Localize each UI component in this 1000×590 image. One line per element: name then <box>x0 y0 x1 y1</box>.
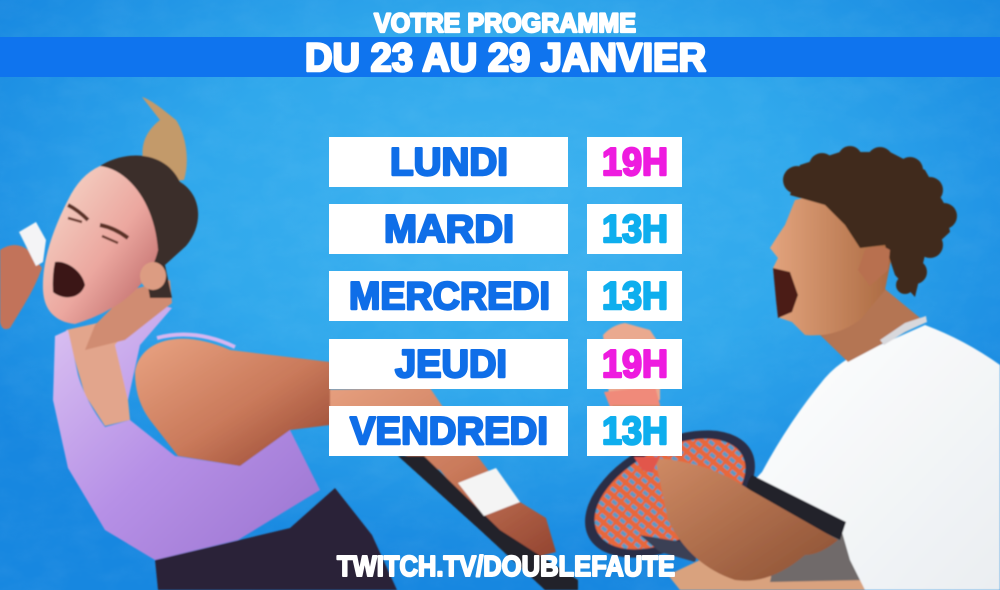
row: vendredi: VENDREDI <box>350 410 548 453</box>
left raised arm <box>0 245 42 329</box>
right wrist pink band <box>604 386 660 407</box>
row: jeudi: JEUDI <box>395 343 507 386</box>
left wrist band <box>19 222 46 266</box>
right hair <box>783 146 957 297</box>
right shirt <box>745 325 1000 590</box>
right necklace <box>880 316 927 345</box>
left eyes <box>68 205 128 243</box>
left ear <box>140 262 166 290</box>
schedule table <box>329 137 682 456</box>
left tank top <box>53 302 320 560</box>
right open mouth <box>773 268 798 318</box>
right face <box>770 185 895 335</box>
heading: dates: DU 23 AU 29 JANVIER <box>305 36 706 80</box>
left face <box>43 166 158 324</box>
row: jeudi: 19H <box>602 343 668 386</box>
left open mouth <box>53 262 85 297</box>
footer link: TWITCH.TV/DOUBLEFAUTE <box>337 551 675 583</box>
row: lundi: LUNDI <box>390 141 508 184</box>
row: mercredi <box>329 271 682 321</box>
row: vendredi: 13H <box>602 410 668 453</box>
left racket <box>398 456 578 590</box>
banner bar <box>0 37 1000 77</box>
row: mercredi: MERCREDI <box>349 275 550 318</box>
left skirt <box>155 488 397 590</box>
row: vendredi <box>329 406 682 456</box>
row: mardi: MARDI <box>384 208 514 251</box>
row: jeudi <box>329 339 682 389</box>
left armhole strap <box>157 335 235 347</box>
left hair <box>100 155 198 298</box>
row: mardi: 13H <box>602 208 668 251</box>
row: lundi: 19H <box>602 141 668 184</box>
left shoulder and upper arm <box>135 339 330 466</box>
right wrist band <box>634 457 660 473</box>
row: mercredi: 13H <box>602 275 668 318</box>
left arm lower <box>300 388 556 560</box>
row: mardi <box>329 204 682 254</box>
left hair bun <box>142 97 187 182</box>
right forearm behind boxes <box>612 405 660 465</box>
right arm <box>655 458 838 581</box>
right sleeve trim <box>746 475 846 540</box>
heading: votre programme: VOTRE PROGRAMME <box>374 8 636 38</box>
row: lundi <box>329 137 682 187</box>
right lower hand <box>668 560 865 590</box>
right grey lining <box>770 530 865 582</box>
right raised fist <box>603 323 660 405</box>
player: left woman <box>0 97 578 590</box>
right ear <box>858 246 890 286</box>
player: right man <box>564 146 1000 590</box>
racket <box>564 404 776 584</box>
right neck <box>815 285 925 362</box>
left neck <box>85 280 172 350</box>
left wristband nike <box>458 468 520 516</box>
left chest <box>66 318 130 426</box>
